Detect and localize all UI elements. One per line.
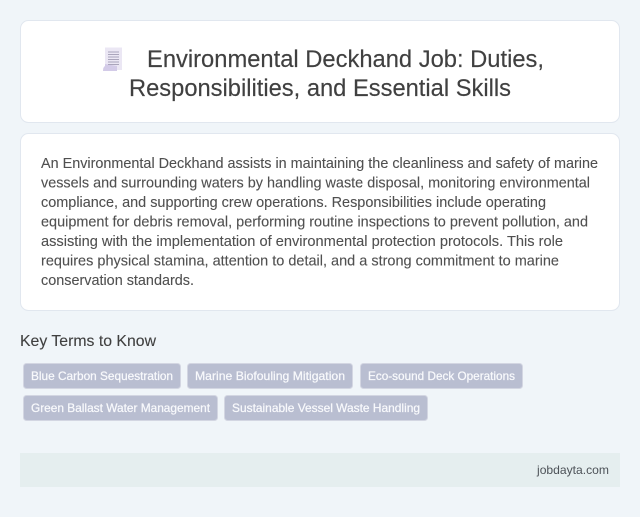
text block: job description: requires physical stamina, attention to detail, and a strong commitment to marine bbox=[41, 254, 559, 270]
text block: job description: vessels and surrounding waters by handling waste disposal, monitoring environmental bbox=[41, 176, 590, 192]
tag: biofouling bbox=[188, 364, 352, 388]
tag: blue carbon: Blue Carbon Sequestration bbox=[31, 369, 173, 383]
tag: blue carbon bbox=[24, 364, 180, 388]
text block: job description: compliance, and supporting crew operations. Responsibilities include operating bbox=[41, 195, 546, 211]
footer bbox=[20, 453, 620, 487]
tags: key terms bbox=[24, 364, 522, 420]
panel: title card bbox=[20, 20, 620, 122]
footer: jobdayta.com bbox=[536, 463, 609, 477]
title: Responsibilities, and Essential Skills bbox=[129, 75, 511, 102]
text block: job description bbox=[41, 156, 598, 289]
title bbox=[129, 46, 544, 102]
heading: key terms: Key Terms to Know bbox=[20, 333, 156, 350]
tag: ballast water: Green Ballast Water Management bbox=[31, 401, 211, 415]
icon: document scroll bbox=[103, 48, 122, 71]
text block: job description: conservation standards. bbox=[41, 273, 194, 289]
tag: ballast water bbox=[24, 396, 218, 420]
text block: job description: An Environmental Deckhand assists in maintaining the cleanliness and safety of marine bbox=[41, 156, 598, 172]
title: Environmental Deckhand Job: Duties, bbox=[147, 46, 544, 73]
tag: vessel waste bbox=[224, 396, 428, 420]
text block: job description: assisting with the implementation of environmental protection protocols. This role bbox=[41, 234, 563, 250]
tag: eco-sound bbox=[360, 364, 522, 388]
panel: description card bbox=[20, 134, 620, 310]
tag: vessel waste: Sustainable Vessel Waste Handling bbox=[232, 401, 420, 415]
tag: biofouling: Marine Biofouling Mitigation bbox=[195, 369, 345, 383]
text block: job description: equipment for debris removal, performing routine inspections to prevent pollution, and bbox=[41, 214, 588, 230]
tag: eco-sound: Eco-sound Deck Operations bbox=[368, 369, 515, 383]
